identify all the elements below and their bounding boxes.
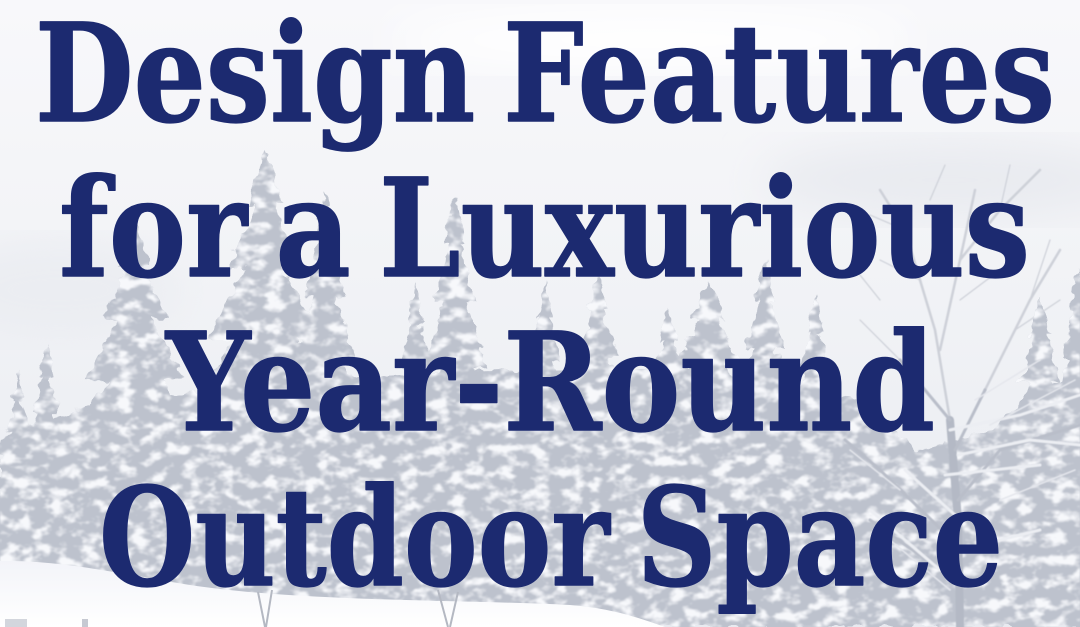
background: bare deciduous tree limbs	[845, 360, 1080, 627]
background: snowy foreground	[0, 561, 665, 627]
background: snow-covered conifer forest	[0, 150, 1080, 627]
title line 3: Year-Round	[164, 303, 935, 463]
background: bare deciduous tree crown	[860, 165, 1060, 420]
